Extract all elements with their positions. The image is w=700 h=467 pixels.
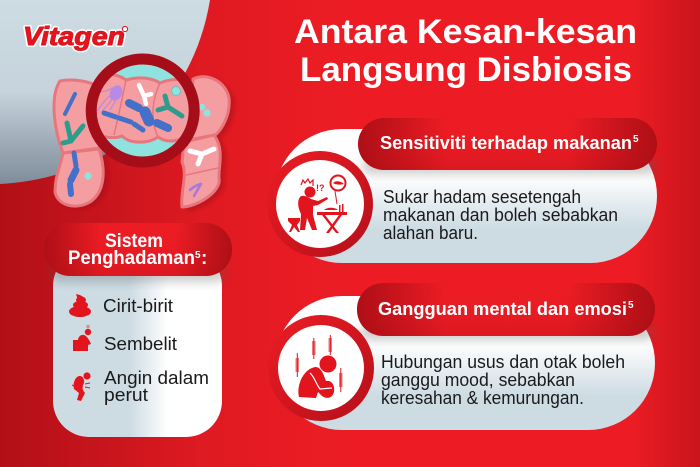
- card text: makanan dan boleh sebabkan: [383, 205, 618, 225]
- icon: person on toilet: [73, 325, 91, 351]
- card text: Sukar hadam sesetengah: [383, 187, 581, 207]
- icon: person with stomach ache: [72, 372, 91, 401]
- card heading: [358, 118, 657, 170]
- panel heading: 5: [195, 250, 201, 261]
- panel: Sensitiviti terhadap makanan: [267, 118, 657, 263]
- magnifier lens: [98, 64, 189, 156]
- card heading: Sensitiviti terhadap makanan: [380, 133, 632, 153]
- card text: [383, 187, 618, 243]
- panel: Sistem Penghadaman: [44, 223, 232, 437]
- item: Angin dalam perut: perut: [104, 385, 148, 405]
- card heading: Gangguan mental dan emosi: [378, 299, 627, 319]
- item: Sembelit: Sembelit: [104, 334, 177, 354]
- card heading: 5: [628, 300, 634, 311]
- card heading: [357, 283, 655, 336]
- card text: Hubungan usus dan otak boleh: [381, 352, 625, 372]
- magnifier ring: [91, 59, 194, 162]
- item: Sembelit: [73, 325, 177, 354]
- icon: person reacting to food: [267, 151, 373, 257]
- logo: Vitagen: Vitagen: [23, 21, 125, 51]
- item: Angin dalam perut: Angin dalam: [104, 368, 209, 388]
- panel body: [53, 250, 222, 437]
- intestine lobes: [54, 77, 229, 207]
- card text: [381, 352, 625, 408]
- lobe shadows: [59, 80, 234, 210]
- panel: Gangguan mental dan emosi: [268, 283, 655, 430]
- item: Cirit-birit: Cirit-birit: [103, 296, 173, 316]
- lens bacteria: [96, 83, 182, 130]
- title: Antara Kesan-kesan: [294, 13, 637, 51]
- panel heading: :: [201, 248, 207, 269]
- outer bacteria: [63, 94, 214, 196]
- card text: alahan baru.: [383, 223, 478, 243]
- title: Langsung Disbiosis: [300, 51, 632, 89]
- logo: Vitagen: Vitagen: [23, 21, 125, 51]
- grey corner shape: [0, 0, 210, 184]
- panel heading: Sistem: [105, 231, 163, 252]
- title: [294, 13, 637, 89]
- panel heading: Penghadaman: [68, 248, 195, 269]
- card body: [275, 296, 655, 430]
- icon: stool: [69, 294, 91, 317]
- card text: ganggu mood, sebabkan: [381, 370, 575, 390]
- card heading: 5: [633, 134, 639, 145]
- panel heading: [44, 223, 232, 276]
- icon: sad person curled up: [268, 315, 374, 421]
- item: Angin dalam perut: [72, 368, 209, 405]
- item: Cirit-birit: [69, 294, 173, 317]
- illustration: intestine with magnifier: [54, 59, 234, 210]
- icon: person reacting to food: !?: [316, 183, 324, 193]
- card text: keresahan & kemurungan.: [381, 388, 584, 408]
- card body: [275, 129, 657, 263]
